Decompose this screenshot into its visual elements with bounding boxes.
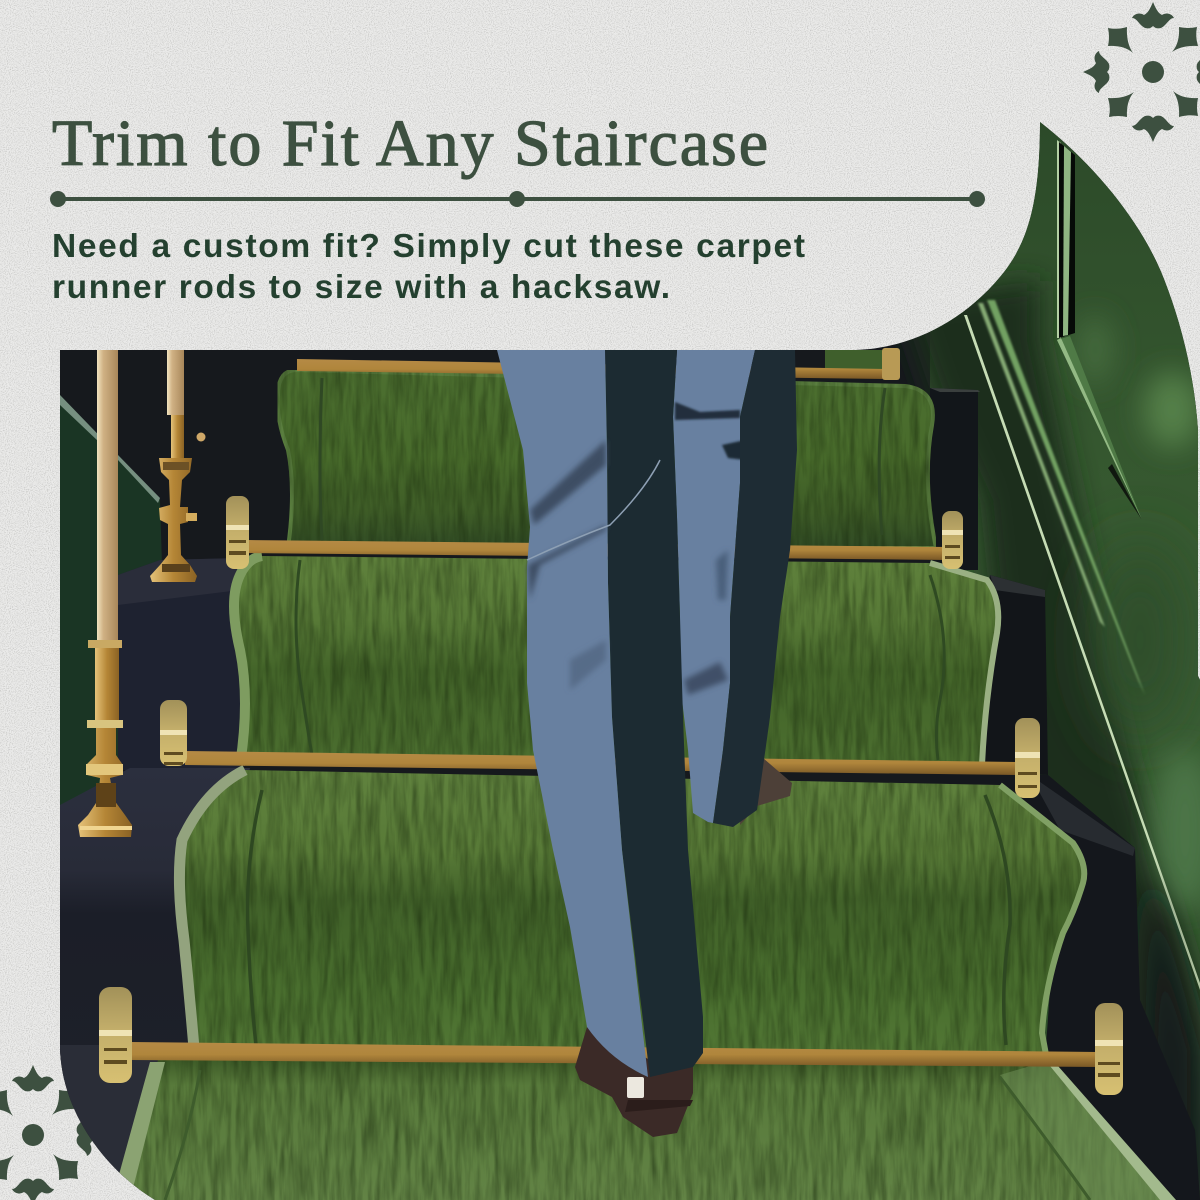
carpet runner third step (179, 770, 1084, 1060)
left glass balustrade (60, 395, 162, 820)
brass newel post front (78, 350, 132, 837)
title divider (50, 191, 985, 207)
person: rear trouser fold shadows (675, 402, 745, 695)
person: rear trouser leg dark side (713, 350, 797, 827)
carpet runner bottom tread (112, 1060, 1176, 1200)
brass newel post back (150, 350, 206, 582)
person: trouser fold shadows (527, 440, 660, 690)
panel slit (1057, 140, 1075, 338)
dark stair treads right (930, 388, 1200, 1200)
stair rod 1 (226, 496, 963, 569)
carpet runner second step (234, 556, 998, 765)
person: front shoe (575, 1027, 693, 1137)
description text (52, 228, 805, 306)
stair rod 3 (99, 987, 1123, 1095)
title: Trim to Fit Any Staircase (52, 107, 768, 180)
panel bevel (1057, 336, 1142, 520)
stair rod 2 (160, 700, 1040, 798)
description text: runner rods to size with a hacksaw. (52, 269, 670, 306)
stair rod 0 top (297, 348, 900, 380)
person: rear shoe (740, 758, 792, 825)
dark stair treads left (60, 558, 250, 1200)
ornament: top right rosette (1083, 2, 1200, 142)
person: front trouser leg dark side (605, 350, 703, 1077)
person: rear trouser leg light side (673, 350, 755, 823)
ornament: bottom left rosette (0, 1065, 103, 1200)
description text: Need a custom fit? Simply cut these carpet (52, 228, 805, 265)
person: front trouser leg light side (497, 350, 648, 1077)
right green wall with panel mouldings (900, 120, 1200, 1200)
skirting mouldings (964, 300, 1200, 990)
carpet runner top step (278, 350, 936, 548)
